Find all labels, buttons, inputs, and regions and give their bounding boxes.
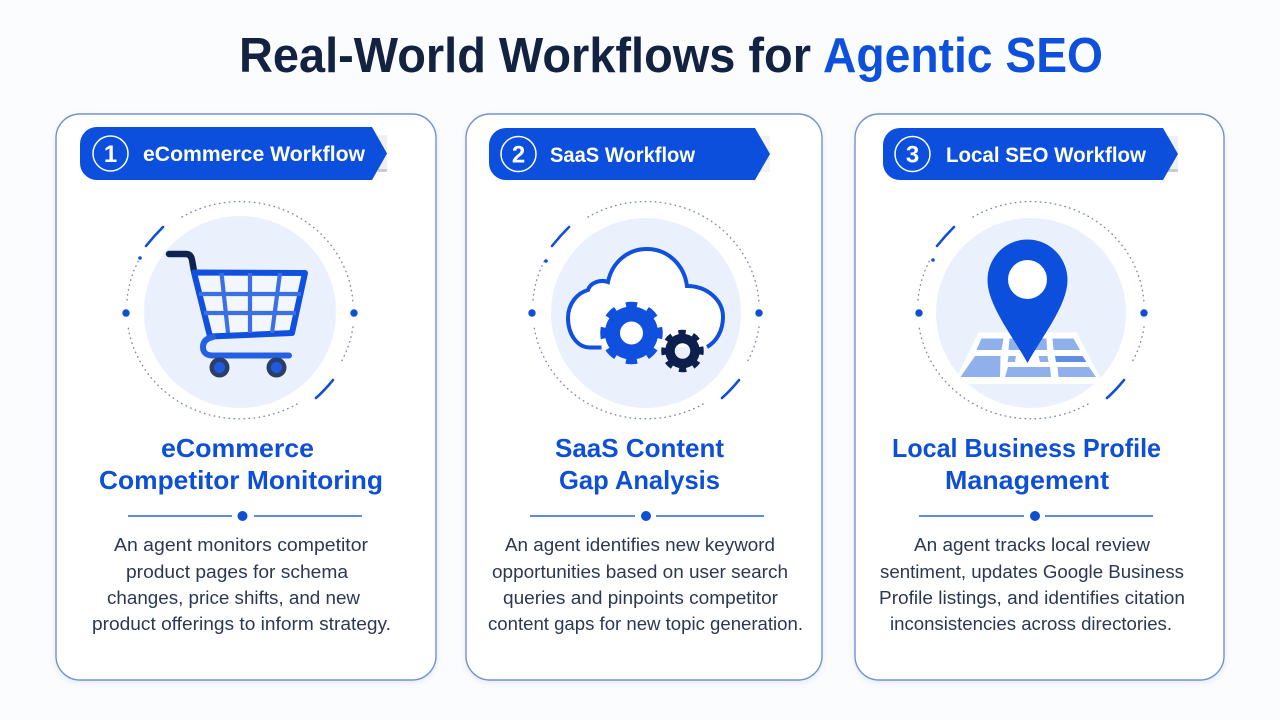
ribbon: Local SEO Workflow: 3 — [906, 142, 919, 168]
description: eCommerce: product offerings to inform strategy. — [92, 614, 391, 634]
description: SaaS: opportunities based on user search — [492, 562, 788, 582]
description: Local SEO: Profile listings, and identifies citation — [879, 588, 1185, 608]
ribbon: SaaS Workflow: 2 — [512, 142, 525, 168]
heading: eCommerce Competitor Monitoring — [99, 433, 383, 495]
icon: map pin — [915, 202, 1148, 419]
heading: eCommerce Competitor Monitoring: Competitor Monitoring — [99, 465, 383, 495]
description: eCommerce: changes, price shifts, and new — [107, 588, 361, 608]
description: Local SEO: inconsistencies across directories. — [890, 614, 1172, 634]
heading: SaaS Content Gap Analysis: Gap Analysis — [559, 465, 720, 495]
ribbon: Local SEO Workflow — [883, 128, 1178, 180]
heading: Local Business Profile Management: Local Business Profile — [892, 433, 1161, 463]
description: SaaS: queries and pinpoints competitor — [503, 588, 778, 608]
title — [239, 29, 1103, 83]
ribbon: SaaS Workflow: SaaS Workflow — [550, 144, 696, 167]
ribbon: SaaS Workflow — [489, 128, 770, 180]
ribbon: eCommerce Workflow: eCommerce Workflow — [143, 143, 366, 166]
panel: Local SEO workflow — [855, 114, 1224, 680]
ribbon: Local SEO Workflow: Local SEO Workflow — [946, 144, 1147, 167]
ribbon: eCommerce Workflow — [80, 127, 387, 180]
description: eCommerce — [92, 535, 391, 634]
heading: SaaS Content Gap Analysis — [555, 433, 724, 495]
description: SaaS: An agent identifies new keyword — [505, 535, 775, 555]
description: Local SEO: sentiment, updates Google Business — [880, 562, 1184, 582]
icon: cloud with gears — [528, 202, 763, 419]
description: Local SEO: An agent tracks local review — [914, 535, 1151, 555]
icon: shopping cart — [122, 202, 358, 419]
description: SaaS: content gaps for new topic generation. — [488, 614, 803, 634]
heading: eCommerce Competitor Monitoring: eCommerce — [161, 433, 314, 463]
heading: Local Business Profile Management: Management — [945, 465, 1109, 495]
description: eCommerce: product pages for schema — [126, 562, 349, 582]
description: eCommerce: An agent monitors competitor — [114, 535, 368, 555]
description: Local SEO — [879, 535, 1185, 634]
heading: Local Business Profile Management — [892, 433, 1161, 495]
ribbon: eCommerce Workflow: 1 — [104, 141, 117, 168]
panel: eCommerce workflow — [56, 114, 436, 680]
panel: SaaS workflow — [466, 114, 822, 680]
description: SaaS — [488, 535, 803, 634]
title: Agentic SEO — [823, 29, 1103, 83]
heading: SaaS Content Gap Analysis: SaaS Content — [555, 433, 724, 463]
title: Real-World Workflows for — [239, 29, 811, 83]
